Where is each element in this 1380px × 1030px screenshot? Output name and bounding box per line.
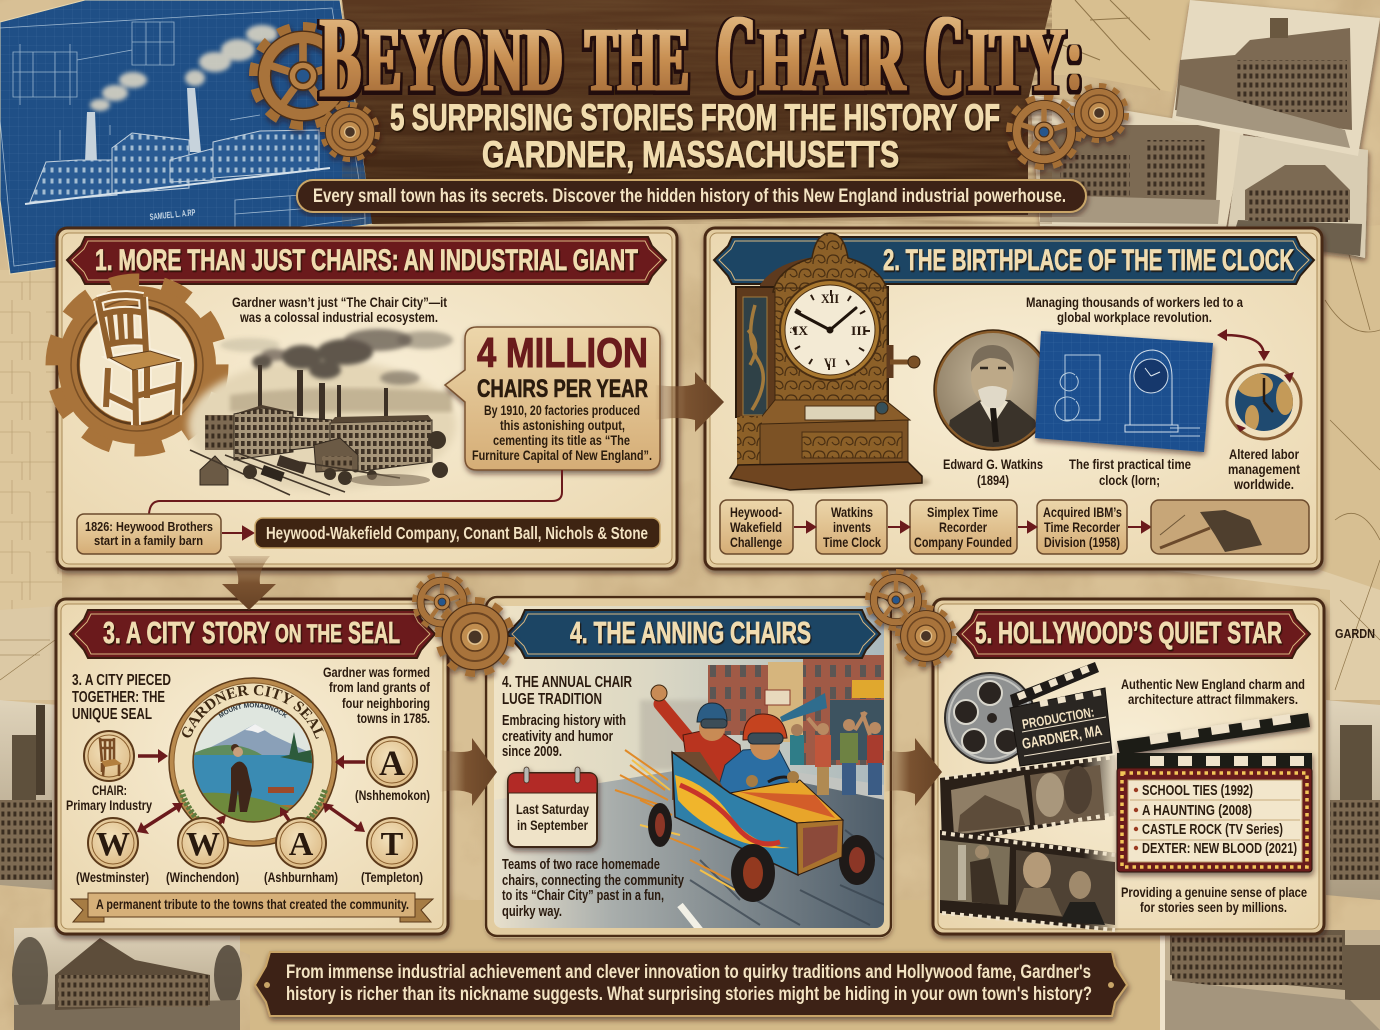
luge intro: creativity and humor xyxy=(502,729,613,745)
callout: 4 million chairs: cementing its title as “The xyxy=(493,433,630,448)
heading ribbon 3 xyxy=(70,610,435,658)
factory illustration xyxy=(188,329,456,495)
callout: 4 million chairs xyxy=(445,327,660,470)
callout: 4 million chairs: CHAIRS PER YEAR xyxy=(477,375,648,403)
luge heading: 4. THE ANNUAL CHAIR xyxy=(502,674,632,691)
caption: labor management: management xyxy=(1228,461,1300,477)
marquee list of films: A HAUNTING (2008) xyxy=(1142,802,1252,819)
portrait of Edward G. Watkins xyxy=(934,330,1052,450)
land grant text: towns in 1785. xyxy=(357,710,430,726)
letter medallion T: T xyxy=(381,826,404,863)
medallion labels: (Nshhemokon) xyxy=(355,788,430,803)
top-right gears xyxy=(1010,86,1126,166)
luge intro: since 2009. xyxy=(502,744,562,760)
Gardner city seal: GARDNER CITY SEAL xyxy=(182,685,324,739)
double arrow xyxy=(1217,329,1270,361)
luge heading: LUGE TRADITION xyxy=(502,691,602,708)
panel 3: city seal xyxy=(51,596,454,942)
1826 box: start in a family barn xyxy=(94,533,203,548)
title: EYOND xyxy=(365,9,563,110)
timeline: Challenge xyxy=(730,534,782,550)
timeline: Division (1958) xyxy=(1044,534,1120,550)
side heading: TOGETHER: THE xyxy=(72,689,165,706)
antique time clock illustration: VI xyxy=(824,355,836,370)
heading ribbon 5 xyxy=(957,610,1310,658)
seal arrows xyxy=(137,749,365,834)
tagline bar: Every small town has its secrets. Discover the hidden history of this New England industrial powerhouse. xyxy=(313,186,1066,207)
antique time clock illustration: XII xyxy=(821,291,839,306)
heading ribbon 1: 1. MORE THAN JUST CHAIRS: AN INDUSTRIAL GIANT xyxy=(95,244,638,277)
text: : xyxy=(1067,7,1082,108)
antique time clock illustration xyxy=(730,233,930,492)
letter medallion W: W xyxy=(186,826,220,863)
caption: labor management xyxy=(1228,446,1300,492)
heading ribbon 3: ON THE xyxy=(275,620,342,648)
timeline: Wakefield xyxy=(730,519,782,535)
subtitle: GARDNER, MASSACHUSETTS xyxy=(482,134,899,175)
letter medallion A: A xyxy=(379,743,405,783)
luge description: chairs, connecting the community xyxy=(502,873,684,889)
1826 box: 1826: Heywood Brothers xyxy=(85,519,213,534)
chair medallion xyxy=(84,731,134,781)
timeline: invents xyxy=(833,519,871,535)
marquee list of films: DEXTER: NEW BLOOD (2021) xyxy=(1142,840,1297,857)
letter medallion T xyxy=(367,818,417,868)
caption: first practical clock: The first practical time xyxy=(1069,456,1191,472)
medallion labels: (Templeton) xyxy=(361,870,423,885)
background photos: top right xyxy=(1030,0,1380,258)
intro text xyxy=(232,294,447,325)
calendar icon: in September xyxy=(517,817,588,833)
heading ribbon 3: STORY xyxy=(202,615,270,650)
callout: 4 million chairs: By 1910, 20 factories produced xyxy=(484,403,640,418)
luge intro xyxy=(502,713,626,760)
antique time clock illustration: IX xyxy=(793,323,809,338)
clapperboard: production: GARDNER, MA xyxy=(1021,722,1104,753)
racers xyxy=(651,685,797,795)
clapperboard: production: PRODUCTION: xyxy=(1021,705,1095,732)
tagline bar xyxy=(297,180,1086,212)
wooden title board xyxy=(342,0,1052,224)
title: THE xyxy=(585,9,689,110)
closing text xyxy=(1121,884,1307,915)
background photo: left tower xyxy=(0,700,58,890)
intro text: global workplace revolution. xyxy=(1057,309,1212,325)
land grant text: Gardner was formed xyxy=(323,664,430,680)
letter medallion W: W xyxy=(96,826,130,863)
luge description: to its “Chair City” past in a fun, xyxy=(502,888,664,904)
footer plaque xyxy=(255,952,1127,1016)
letter medallion W xyxy=(178,818,228,868)
blueprint illustration xyxy=(0,0,373,274)
intro text: architecture attract filmmakers. xyxy=(1128,691,1298,707)
side heading: UNIQUE SEAL xyxy=(72,706,152,723)
land grant text xyxy=(323,664,430,726)
antique time clock illustration: III xyxy=(851,323,867,338)
medallion labels xyxy=(66,783,430,885)
companies bar xyxy=(255,518,660,548)
caption: labor management: Altered labor xyxy=(1229,446,1299,462)
intro text: Managing thousands of workers led to a xyxy=(1026,294,1243,310)
luge heading xyxy=(502,674,632,708)
timeline: Company Founded xyxy=(914,534,1012,550)
calendar icon: Last Saturday xyxy=(516,801,589,817)
calendar icon xyxy=(508,767,597,847)
tribute banner: A permanent tribute to the towns that created the community. xyxy=(96,896,409,912)
medallion labels: (Westminster) xyxy=(76,870,149,885)
timeline: Recorder xyxy=(939,519,987,535)
timeline: Watkins xyxy=(831,504,873,520)
callout: 4 million chairs: this astonishing output, xyxy=(500,418,625,433)
timeline xyxy=(720,500,1309,554)
top-left gears xyxy=(255,28,377,159)
arrow: panel 3 to 4 xyxy=(440,738,497,806)
luge description: Teams of two race homemade xyxy=(502,857,660,873)
caption: first practical clock xyxy=(1069,456,1191,488)
homemade race car xyxy=(648,752,875,902)
intro text xyxy=(1026,294,1243,325)
intro text: Authentic New England charm and xyxy=(1121,676,1305,692)
blueprint illustration: SAMUEL L. A.RP xyxy=(149,207,196,222)
medallion labels: (Ashburnham) xyxy=(264,870,338,885)
medallion labels: CHAIR: xyxy=(92,783,127,798)
subtitle: 5 SURPRISING STORIES FROM THE HISTORY OF xyxy=(390,97,1000,138)
caption: Watkins: Edward G. Watkins xyxy=(943,456,1043,472)
Gardner city seal xyxy=(168,677,338,847)
heading ribbon 3: 3. A CITY xyxy=(103,615,195,650)
intro text: Gardner wasn’t just “The Chair City”—it xyxy=(232,294,447,310)
race illustration xyxy=(494,606,888,930)
heading ribbon 4: 4. THE ANNING CHAIRS xyxy=(570,615,811,650)
marquee list of films: SCHOOL TIES (1992) xyxy=(1142,782,1253,799)
letter medallion A xyxy=(367,737,417,787)
footer plaque: history is richer than its nickname suggests. What surprising stories might be hiding in your own town's history? xyxy=(286,984,1092,1005)
timeline: Time Recorder xyxy=(1044,519,1120,535)
background photo: right tower xyxy=(1326,700,1380,900)
arrow: panel 4 to 5 xyxy=(884,738,942,806)
panel 5: Hollywood xyxy=(933,599,1324,934)
timeline: Simplex Time xyxy=(927,504,998,520)
globe icon xyxy=(1227,365,1301,439)
callout: 4 million chairs: 4 MILLION xyxy=(477,329,648,376)
companies bar: Heywood-Wakefield Company, Conant Ball, Nichols & Stone xyxy=(266,523,648,543)
junction gears left xyxy=(415,575,511,673)
film reel icon xyxy=(945,673,1035,763)
gear with chair icon xyxy=(58,286,216,444)
timeline: Time Clock xyxy=(823,534,881,550)
caption: labor management: worldwide. xyxy=(1233,476,1294,492)
footer plaque: From immense industrial achievement and clever innovation to quirky traditions and Hollywood fame, Gardner's xyxy=(286,962,1091,983)
title: ITY xyxy=(968,9,1065,110)
medallion labels: Primary Industry xyxy=(66,798,152,813)
heading ribbon 2 xyxy=(714,237,1314,284)
medallion labels: (Winchendon) xyxy=(166,870,239,885)
title xyxy=(320,0,1082,122)
side heading xyxy=(72,672,171,723)
land grant text: four neighboring xyxy=(342,695,430,711)
panel 1: industrial giant xyxy=(57,228,677,569)
side heading: 3. A CITY PIECED xyxy=(72,672,171,689)
film strip upper xyxy=(940,755,1118,845)
crowd xyxy=(790,712,883,795)
title: HAIR xyxy=(760,9,906,110)
connector line xyxy=(149,470,562,514)
caption: Watkins xyxy=(943,456,1043,488)
luge description: quirky way. xyxy=(502,904,562,920)
land grant text: from land grants of xyxy=(329,679,430,695)
clapperboard: production xyxy=(1010,662,1112,766)
arrow to companies xyxy=(222,527,253,539)
tribute banner xyxy=(71,893,433,922)
heading ribbon 4 xyxy=(507,610,880,658)
panel 4: annual chair luge xyxy=(486,597,891,936)
letter medallion A: A xyxy=(289,826,314,863)
caption: first practical clock: clock (lorn; xyxy=(1099,472,1160,488)
time clock blueprint xyxy=(1035,331,1213,452)
subtitle xyxy=(390,97,1000,175)
heading ribbon 1 xyxy=(67,237,666,284)
closing text: Providing a genuine sense of place xyxy=(1121,884,1307,900)
marquee list of films: CASTLE ROCK (TV Series) xyxy=(1142,821,1283,838)
intro text: was a colossal industrial ecosystem. xyxy=(239,309,438,325)
caption: Watkins: (1894) xyxy=(977,472,1009,488)
luge description xyxy=(502,857,684,920)
marquee list of films xyxy=(1117,713,1312,872)
film strip lower xyxy=(940,830,1119,932)
arrow: panel 1 to 3 xyxy=(222,556,276,610)
timeline: Acquired IBM’s xyxy=(1043,504,1122,520)
intro text xyxy=(1121,676,1305,707)
Gardner city seal: MOUNT MONADNOCK xyxy=(218,702,288,718)
luge intro: Embracing history with xyxy=(502,713,626,729)
arrow: panel 1 to 2 xyxy=(655,372,724,432)
timeline: Heywood- xyxy=(730,504,782,520)
background photo: bottom right street xyxy=(1160,928,1380,1030)
panel 2: time clock xyxy=(705,228,1322,569)
heading ribbon 3: SEAL xyxy=(348,615,400,650)
letter medallion A xyxy=(276,818,326,868)
background photo: bottom left building xyxy=(12,925,242,1030)
junction gears right xyxy=(868,572,954,664)
1826 box xyxy=(77,514,221,554)
callout: 4 million chairs: Furniture Capital of New England”. xyxy=(472,448,652,463)
closing text: for stories seen by millions. xyxy=(1140,899,1287,915)
letter medallion W xyxy=(88,818,138,868)
